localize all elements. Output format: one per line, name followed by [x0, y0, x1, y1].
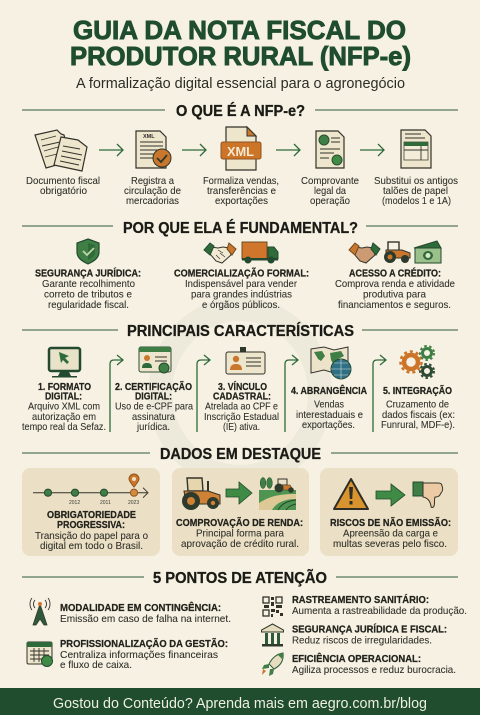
card: obrigatoriedade — [22, 468, 160, 556]
arrow 1 — [99, 144, 123, 156]
arrow: elbow 3 — [285, 355, 298, 432]
text: profissionalização: e fluxo de caixa. — [60, 659, 132, 671]
text: segurança jurídica e fiscal — [292, 622, 447, 646]
heading: características: PRINCIPAIS CARACTERÍSTICAS — [127, 321, 354, 340]
icon: farm field — [259, 478, 296, 510]
text: documento fiscal — [26, 175, 100, 197]
text: registra: circulação de — [124, 185, 181, 197]
text: comprovante: operação — [310, 195, 350, 207]
panel: por que é fundamental — [22, 218, 458, 311]
icon: qr code — [263, 597, 283, 617]
text: segurança jurídica e fiscal: Reduz riscos de irregularidades. — [292, 634, 432, 646]
icon: handshake — [204, 243, 236, 263]
icon: map and globe — [311, 347, 351, 379]
icon: handshake, tractor and cash — [349, 241, 441, 263]
text: profissionalização — [60, 637, 228, 671]
arrow: green — [226, 482, 252, 504]
chart: timeline: 2011 — [100, 500, 111, 506]
text: segurança jurídica: regularidade fiscal. — [48, 299, 129, 311]
panel: dados em destaque — [22, 446, 458, 556]
heading: o que é: O QUE É A NFP-e? — [176, 101, 305, 120]
text: integração: Cruzamento de — [386, 398, 449, 410]
icon: warning — [334, 479, 368, 509]
title — [70, 15, 411, 71]
text: acesso a crédito: ACESSO A CRÉDITO: — [349, 266, 441, 280]
heading: dados: DADOS EM DESTAQUE — [160, 446, 321, 463]
text: substitui: Substitui os antigos — [374, 175, 458, 187]
text: formato digital: Arquivo XML com — [28, 400, 100, 412]
text: comercialização formal: e órgãos públicos. — [202, 299, 280, 311]
text: integração: Funrural, MDF-e). — [381, 419, 455, 431]
heading: pontos: 5 PONTOS DE ATENÇÃO — [153, 567, 327, 587]
text: eficiência: EFICIÊNCIA OPERACIONAL: — [292, 652, 421, 665]
text: profissionalização: Centraliza informações financeiras — [60, 649, 218, 661]
text: formaliza: exportações — [215, 195, 268, 207]
icon: antenna — [30, 598, 50, 625]
text: substitui: talões de papel — [383, 185, 448, 197]
text: acesso a crédito: produtiva para — [363, 288, 426, 300]
text: comprovante — [301, 175, 359, 207]
text: certificação digital: Uso de e-CPF para — [115, 400, 193, 412]
icon: thumbs down — [413, 482, 443, 508]
text: certificação digital: DIGITAL: — [135, 390, 172, 402]
arrow: elbow 4 — [373, 355, 386, 432]
text: abrangência: interestaduais e — [296, 409, 363, 421]
arrow: elbow 2 — [197, 355, 210, 432]
card: obrigatoriedade: PROGRESSIVA: — [57, 519, 125, 531]
card: comprovação de renda: COMPROVAÇÃO DE RENDA: — [176, 516, 303, 529]
text: comprovante: Comprovante — [301, 175, 359, 187]
panel: 5 pontos de atenção — [22, 567, 467, 676]
text: formato digital: autorização em — [32, 411, 96, 423]
card: riscos de não emissão: RISCOS DE NÃO EMISSÃO: — [330, 516, 451, 529]
text: acesso a crédito: Comprova renda e atividade — [335, 278, 455, 290]
icon: proof document — [316, 131, 344, 168]
text: modalidade: Emissão em caso de falha na internet. — [60, 613, 231, 625]
text: formato digital: DIGITAL: — [45, 390, 82, 402]
text: eficiência: Agiliza processos e reduz burocracia. — [292, 664, 456, 676]
arrow 4 — [360, 144, 384, 156]
text: comercialização formal: COMERCIALIZAÇÃO FORMAL: — [174, 266, 309, 280]
text: abrangência: exportações. — [302, 419, 355, 431]
text: integração: dados fiscais (ex: — [382, 409, 455, 421]
text: vínculo cadastral: 3. VÍNCULO — [218, 380, 267, 393]
arrow 3 — [276, 144, 300, 156]
panel: principais características — [22, 321, 458, 433]
text: segurança jurídica: SEGURANÇA JURÍDICA: — [35, 266, 141, 280]
text: profissionalização: PROFISSIONALIZAÇÃO DA GESTÃO: — [60, 637, 228, 650]
icon: warning mark — [349, 487, 353, 504]
arrow 2 — [182, 144, 206, 156]
icon: monitor — [49, 348, 80, 378]
icon: institution — [262, 624, 284, 646]
card: riscos de não emissão: Apreensão da carga e — [343, 528, 438, 540]
text: comprovante: legal da — [314, 185, 346, 197]
card: comprovação de renda: aprovação de crédito rural. — [181, 538, 299, 550]
text: comercialização formal — [174, 266, 309, 311]
text: vínculo cadastral: (IE) ativa. — [223, 421, 260, 433]
footer banner — [0, 688, 480, 715]
text: formaliza: transferências e — [207, 185, 276, 197]
text: eficiência — [292, 652, 456, 676]
card: obrigatoriedade: Transição do papel para o — [35, 530, 148, 542]
text: integração: 5. INTEGRAÇÃO — [383, 384, 452, 397]
icon: tractor — [182, 478, 220, 510]
icon: rocket — [262, 653, 283, 676]
arrow: elbow 1 — [110, 355, 123, 432]
text: abrangência: Vendas — [314, 398, 344, 410]
text: formaliza — [203, 175, 279, 207]
icon: truck — [242, 242, 278, 264]
text: modalidade — [60, 601, 231, 625]
text: formaliza: Formaliza vendas, — [203, 175, 279, 187]
text: vínculo cadastral: Inscrição Estadual — [204, 411, 279, 423]
text: registra: Registra a — [131, 175, 174, 187]
card: comprovação de renda: Principal forma para — [196, 528, 284, 540]
text: segurança jurídica: correto de tributos e — [44, 288, 132, 300]
text: certificação digital — [115, 380, 193, 433]
icon: xml document with check: XML — [143, 134, 155, 140]
text: modalidade: MODALIDADE EM CONTINGÊNCIA: — [60, 601, 221, 614]
text: comercialização formal: Indispensável para vender — [185, 278, 297, 290]
subtitle: A formalização digital essencial para o agronegócio — [76, 75, 405, 92]
text: acesso a crédito: financiamentos e seguros. — [338, 299, 451, 311]
text: certificação digital: 2. CERTIFICAÇÃO — [115, 380, 192, 393]
title: GUIA DA NOTA FISCAL DO — [73, 15, 406, 45]
text: rastreamento — [292, 593, 467, 617]
panel: o que é a NFP-e — [22, 101, 458, 207]
title: PRODUTOR RURAL (NFP-e) — [70, 41, 411, 71]
icon: certificate window — [139, 347, 171, 373]
chart: timeline: 2023 — [128, 500, 139, 506]
text: vínculo cadastral — [204, 380, 279, 433]
chart: timeline: 2012 — [69, 500, 80, 506]
icon: shield — [77, 239, 99, 264]
icon: xml document with check — [136, 131, 171, 168]
icon: gears — [400, 346, 434, 378]
icon: spreadsheet — [27, 642, 52, 666]
text: registra: mercadorias — [126, 195, 179, 207]
text: certificação digital: jurídica. — [136, 421, 170, 433]
icon: documents — [35, 130, 87, 171]
text: vínculo cadastral: Atrelada ao CPF e — [205, 400, 278, 412]
text: acesso a crédito — [335, 266, 455, 311]
text: comercialização formal: para grandes indústrias — [191, 288, 292, 300]
text: formato digital — [22, 381, 106, 433]
heading: por que: POR QUE ELA É FUNDAMENTAL? — [123, 218, 358, 237]
card: comprovação de renda — [172, 468, 309, 556]
footer banner: Gostou do Conteúdo? Aprenda mais em aegro.com.br/blog — [53, 695, 427, 712]
text: certificação digital: assinatura — [132, 411, 175, 423]
card: obrigatoriedade: digital em todo o Brasil. — [40, 540, 143, 552]
text: integração — [381, 384, 455, 431]
text: vínculo cadastral: CADASTRAL: — [213, 390, 271, 402]
text: registra — [124, 175, 181, 207]
icon: paper form — [401, 130, 431, 168]
text: formato digital: tempo real da Sefaz. — [22, 421, 106, 433]
text: segurança jurídica e fiscal: SEGURANÇA JURÍDICA E FISCAL: — [292, 622, 447, 636]
text: substitui: (modelos 1 e 1A) — [382, 195, 451, 207]
card: riscos de não emissão: multas severas pelo fisco. — [333, 538, 447, 550]
icon: id badge — [226, 347, 265, 374]
text: documento fiscal: obrigatório — [40, 185, 87, 197]
card: obrigatoriedade: OBRIGATORIEDADE — [47, 509, 136, 521]
text: documento fiscal: Documento fiscal — [26, 175, 100, 187]
text: abrangência — [291, 384, 367, 431]
text: formato digital: 1. FORMATO — [38, 381, 91, 393]
text: abrangência: 4. ABRANGÊNCIA — [291, 384, 367, 397]
chart: timeline — [33, 474, 148, 506]
icon: xml file — [221, 127, 261, 170]
text: substitui — [374, 175, 458, 207]
text: rastreamento: Aumenta a rastreabilidade da produção. — [292, 605, 467, 617]
card: riscos de não emissão — [320, 468, 458, 556]
text: segurança jurídica — [35, 266, 141, 311]
text: rastreamento: RASTREAMENTO SANITÁRIO: — [292, 593, 429, 606]
text: segurança jurídica: Garante recolhimento — [42, 278, 135, 290]
icon: xml file: XML — [227, 145, 254, 159]
arrow: green — [376, 484, 405, 506]
